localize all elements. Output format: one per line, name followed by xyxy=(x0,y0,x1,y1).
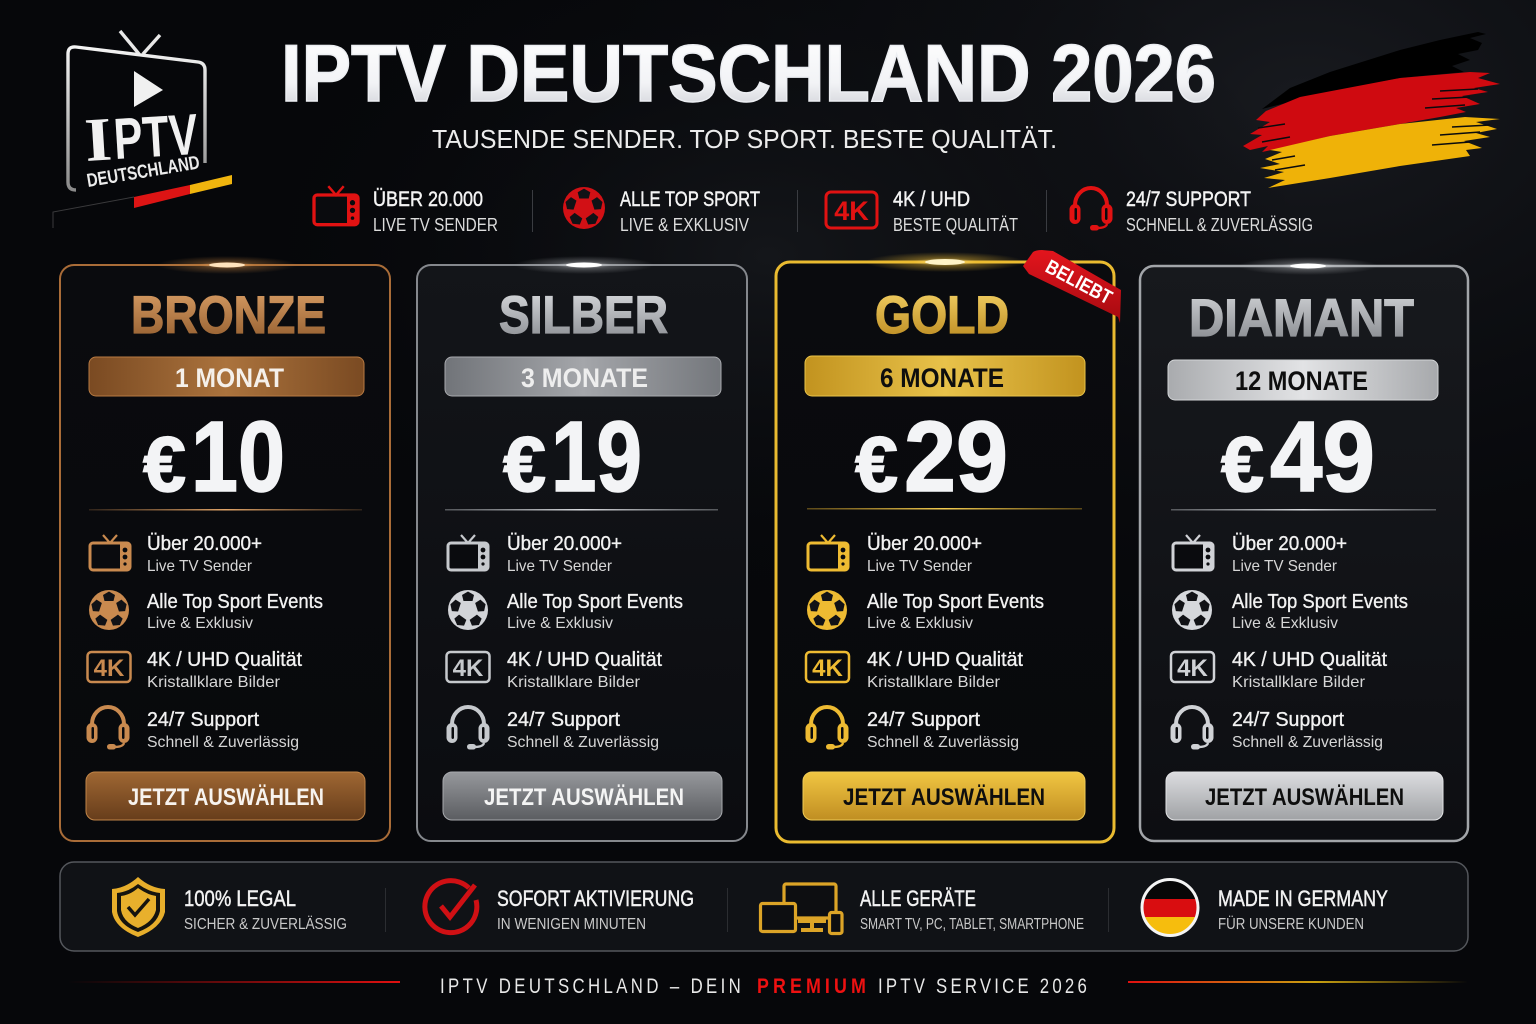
activation subtext: IN WENIGEN MINUTEN xyxy=(497,916,646,933)
feature: support xyxy=(446,707,659,751)
plan name: BRONZE xyxy=(131,286,326,345)
legal subtext: SICHER & ZUVERLÄSSIG xyxy=(184,915,347,933)
icon: red football xyxy=(563,187,605,229)
trust item: activation xyxy=(425,881,694,933)
price: € xyxy=(1221,420,1264,508)
feature: sport xyxy=(89,590,323,632)
channels subtext: LIVE TV SENDER xyxy=(373,215,498,235)
button xyxy=(443,772,722,820)
card frame xyxy=(417,265,747,841)
bar frame xyxy=(60,862,1468,951)
icon: red check circle xyxy=(425,881,477,933)
top feature: 4K xyxy=(826,188,1018,235)
card frame xyxy=(60,265,390,841)
feature: channels xyxy=(90,533,262,575)
plan name: SILBER xyxy=(499,286,668,345)
devices subtext: SMART TV, PC, TABLET, SMARTPHONE xyxy=(860,916,1084,933)
icon: red 4K badge: 4K xyxy=(834,196,869,226)
feature: 4K: Kristallklare Bilder xyxy=(507,674,641,691)
footer tagline: IPTV SERVICE 2026 xyxy=(878,975,1087,999)
price xyxy=(1221,401,1375,513)
footer tagline: PREMIUM xyxy=(757,975,866,998)
price xyxy=(503,401,642,513)
panel: gold plan xyxy=(776,250,1121,842)
top feature: channels xyxy=(314,186,498,235)
feature: sport xyxy=(807,590,1044,632)
ribbon: beliebt xyxy=(1023,250,1121,323)
feature: channels: Live TV Sender xyxy=(867,558,973,575)
price: € xyxy=(855,420,898,508)
footer tagline: IPTV DEUTSCHLAND – DEIN xyxy=(440,975,741,999)
icon: red 4K badge xyxy=(826,192,877,228)
top feature: sport xyxy=(563,187,760,235)
feature: 4K: 4K / UHD Qualität xyxy=(1232,649,1387,671)
icon: play triangle xyxy=(134,71,163,107)
logo letter I: I xyxy=(83,105,114,175)
feature: 4K: 4K / UHD Qualität xyxy=(867,649,1023,671)
feature: 4K: 4K / UHD Qualität xyxy=(507,649,662,671)
panel: diamond plan xyxy=(1140,257,1468,841)
feature: sport: Alle Top Sport Events xyxy=(147,591,323,613)
logo: IPTV Deutschland xyxy=(53,31,232,228)
feature: sport: Alle Top Sport Events xyxy=(1232,591,1408,613)
trust item: made in germany xyxy=(1140,878,1388,938)
duration pill: 12 MONATE xyxy=(1235,366,1368,396)
feature: channels: Live TV Sender xyxy=(1232,558,1338,575)
feature: support: 24/7 Support xyxy=(507,709,620,731)
legal heading: 100% LEGAL xyxy=(184,886,296,911)
support heading: 24/7 SUPPORT xyxy=(1126,188,1251,211)
feature: sport: Live & Exklusiv xyxy=(1232,615,1338,632)
button xyxy=(1166,772,1443,820)
feature: channels: Über 20.000+ xyxy=(1232,533,1347,555)
feature: sport xyxy=(448,590,683,632)
4K heading: 4K / UHD xyxy=(893,188,970,211)
feature: channels: Über 20.000+ xyxy=(867,533,982,555)
duration pill: 1 MONAT xyxy=(175,363,284,393)
price xyxy=(143,401,285,513)
ribbon: beliebt: BELIEBT xyxy=(1042,256,1116,309)
feature: 4K xyxy=(806,649,1023,691)
icon: gold devices xyxy=(760,884,842,934)
feature: sport: Alle Top Sport Events xyxy=(867,591,1044,613)
plan name: DIAMANT xyxy=(1189,289,1414,348)
feature: 4K xyxy=(88,649,302,691)
button xyxy=(86,772,365,820)
feature: support: Schnell & Zuverlässig xyxy=(507,734,659,751)
button: JETZT AUSWÄHLEN xyxy=(1205,784,1404,811)
feature: support: Schnell & Zuverlässig xyxy=(867,734,1019,751)
button xyxy=(803,772,1085,820)
feature: 4K xyxy=(1171,649,1387,691)
feature: 4K: Kristallklare Bilder xyxy=(867,674,1001,691)
feature: support: 24/7 Support xyxy=(1232,709,1344,731)
feature: support xyxy=(806,707,1019,751)
panel: silver plan xyxy=(417,256,747,841)
icon: tv frame xyxy=(68,47,205,190)
feature: sport: Live & Exklusiv xyxy=(867,615,973,632)
icon: red tv xyxy=(314,186,358,225)
activation heading: SOFORT AKTIVIERUNG xyxy=(497,886,694,911)
feature: channels: Live TV Sender xyxy=(507,558,613,575)
sport subtext: LIVE & EXKLUSIV xyxy=(620,215,749,235)
price: € xyxy=(503,420,546,508)
feature: 4K: 4K xyxy=(1177,655,1209,682)
feature: channels: Über 20.000+ xyxy=(147,533,262,555)
logo wordmark Deutschland: DEUTSCHLAND xyxy=(85,152,201,192)
feature: sport: Live & Exklusiv xyxy=(147,615,253,632)
price: 29 xyxy=(904,401,1008,513)
feature: channels xyxy=(448,533,622,575)
card frame xyxy=(776,262,1114,842)
title: IPTV DEUTSCHLAND 2026 xyxy=(281,29,1216,119)
feature: sport: Live & Exklusiv xyxy=(507,615,613,632)
price: 49 xyxy=(1270,401,1375,513)
price: 10 xyxy=(191,401,285,513)
duration pill: 3 MONATE xyxy=(521,363,648,393)
button: JETZT AUSWÄHLEN xyxy=(128,784,324,811)
icon: german flag circle xyxy=(1140,878,1200,938)
devices heading: ALLE GERÄTE xyxy=(860,886,976,911)
price xyxy=(855,401,1008,513)
duration pill xyxy=(445,357,721,396)
4K subtext: BESTE QUALITÄT xyxy=(893,215,1018,235)
feature: channels: Live TV Sender xyxy=(147,558,253,575)
feature: 4K xyxy=(446,649,662,691)
feature: support xyxy=(86,707,299,751)
sport heading: ALLE TOP SPORT xyxy=(620,188,760,211)
feature: channels: Über 20.000+ xyxy=(507,533,622,555)
icon: red headset xyxy=(1070,188,1112,230)
logo letters PTV: PTV xyxy=(112,102,200,172)
subtitle: TAUSENDE SENDER. TOP SPORT. BESTE QUALITÄT. xyxy=(432,124,1057,154)
feature: 4K: 4K xyxy=(94,655,125,682)
plan name: GOLD xyxy=(875,286,1009,345)
feature: support: Schnell & Zuverlässig xyxy=(147,734,299,751)
brush-stroke german flag xyxy=(1243,32,1500,188)
feature: support: Schnell & Zuverlässig xyxy=(1232,734,1383,751)
feature: 4K: 4K / UHD Qualität xyxy=(147,649,302,671)
icon: tv antenna xyxy=(120,31,160,54)
feature: sport xyxy=(1172,590,1408,632)
duration pill: 6 MONATE xyxy=(880,363,1004,393)
germany subtext: FÜR UNSERE KUNDEN xyxy=(1218,915,1364,933)
duration pill xyxy=(805,356,1085,396)
germany heading: MADE IN GERMANY xyxy=(1218,886,1388,911)
feature: 4K: 4K xyxy=(453,655,484,682)
duration pill xyxy=(1168,360,1438,400)
price: € xyxy=(143,420,186,508)
support subtext: SCHNELL & ZUVERLÄSSIG xyxy=(1126,215,1313,235)
feature: channels xyxy=(1173,533,1347,575)
trust item: legal xyxy=(112,877,347,937)
feature: support: 24/7 Support xyxy=(867,709,980,731)
logo german stripe xyxy=(53,175,232,228)
trust item: devices xyxy=(760,884,1084,934)
feature: 4K: 4K xyxy=(812,655,844,682)
price: 19 xyxy=(551,401,642,513)
channels heading: ÜBER 20.000 xyxy=(373,188,483,211)
feature: support: 24/7 Support xyxy=(147,709,259,731)
footer tagline xyxy=(440,975,1087,999)
top feature: support xyxy=(1070,188,1313,235)
feature: 4K: Kristallklare Bilder xyxy=(147,674,281,691)
card frame xyxy=(1140,266,1468,841)
icon: gold shield xyxy=(112,877,165,937)
feature: channels xyxy=(808,533,982,575)
feature: support xyxy=(1170,707,1383,751)
duration pill xyxy=(89,357,364,396)
panel: bronze plan xyxy=(60,256,390,841)
panel: trust bar xyxy=(60,862,1468,951)
feature: sport: Alle Top Sport Events xyxy=(507,591,683,613)
feature: 4K: Kristallklare Bilder xyxy=(1232,674,1366,691)
button: JETZT AUSWÄHLEN xyxy=(843,784,1045,811)
button: JETZT AUSWÄHLEN xyxy=(484,784,684,811)
